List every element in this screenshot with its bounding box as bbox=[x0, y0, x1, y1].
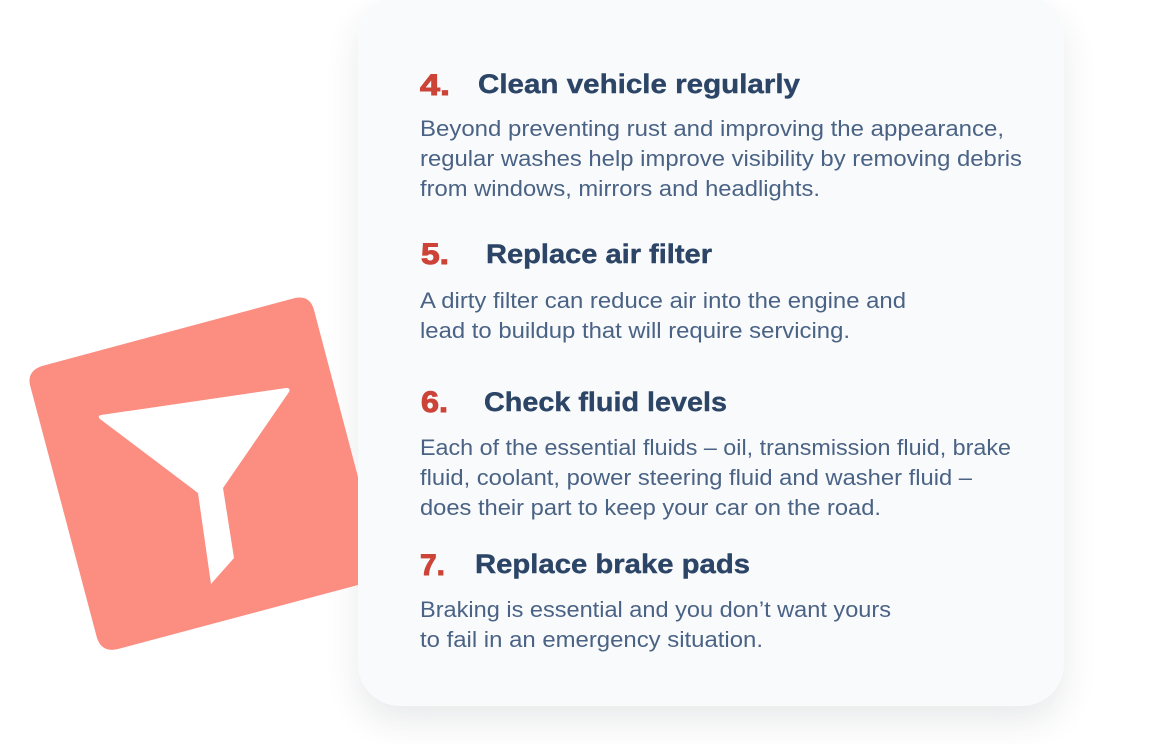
tip 6: fluid, coolant, power steering fluid and washer fluid – bbox=[420, 465, 973, 490]
white funnel glyph bbox=[99, 388, 290, 584]
tip 4: Clean vehicle regularly bbox=[478, 69, 800, 99]
tip 7: Replace brake pads bbox=[475, 549, 750, 579]
tip 7: 7. bbox=[420, 549, 445, 582]
tip 5: 5. bbox=[421, 238, 449, 271]
tip 6 bbox=[420, 386, 1011, 520]
tip 4: from windows, mirrors and headlights. bbox=[420, 176, 820, 201]
tip 5: lead to buildup that will require servicing. bbox=[420, 318, 850, 343]
tip 5: A dirty filter can reduce air into the engine and bbox=[420, 288, 906, 313]
tip 5 bbox=[420, 238, 906, 343]
tip 6: Each of the essential fluids – oil, transmission fluid, brake bbox=[420, 435, 1011, 460]
tip 4: regular washes help improve visibility by removing debris bbox=[420, 146, 1022, 171]
tip 7 bbox=[420, 549, 891, 652]
tip 6: 6. bbox=[421, 386, 448, 419]
tip 6: does their part to keep your car on the road. bbox=[420, 495, 881, 520]
tip 4 bbox=[420, 69, 1022, 201]
tip 7: to fail in an emergency situation. bbox=[420, 627, 763, 652]
tip 6: Check fluid levels bbox=[484, 387, 727, 417]
tip 4: 4. bbox=[420, 69, 450, 102]
tip 7: Braking is essential and you don’t want yours bbox=[420, 597, 891, 622]
tip 4: Beyond preventing rust and improving the appearance, bbox=[420, 116, 1004, 141]
panel: maintenance tips card bbox=[358, 0, 1064, 706]
salmon rotated tile bbox=[30, 298, 358, 650]
tip 5: Replace air filter bbox=[486, 239, 713, 269]
